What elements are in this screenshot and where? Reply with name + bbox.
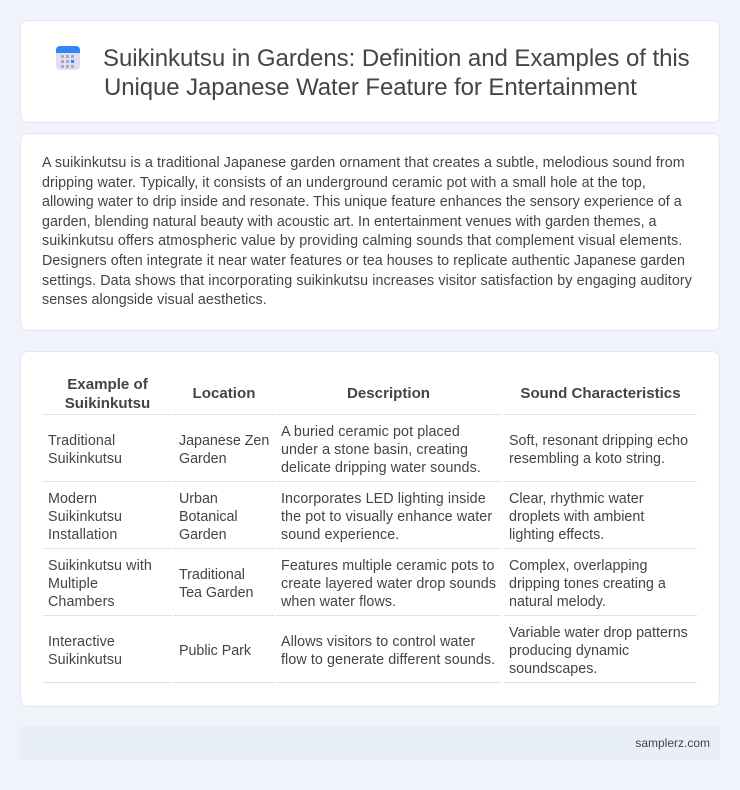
text block: definition: suikinkutsu offers atmospheric value by providing calming sounds that complement visual elements. — [42, 233, 682, 249]
row: modern: lighting effects. — [509, 527, 604, 543]
row: multiple chambers: Suikinkutsu with — [48, 558, 152, 574]
row: modern: Incorporates LED lighting inside — [281, 491, 486, 507]
row: multiple chambers: Tea Garden — [179, 585, 253, 601]
text block: definition: settings. Data shows that incorporating suikinkutsu increases visitor satisfaction by engaging auditory — [42, 273, 692, 289]
title: Unique Japanese Water Feature for Entertainment — [104, 74, 637, 101]
text block: definition: Designers often integrate it near water features or tea houses to replicate authentic Japanese garden — [42, 253, 685, 269]
icon: calendar — [56, 46, 80, 70]
row: modern — [48, 491, 644, 543]
row: traditional: Traditional — [48, 433, 115, 449]
row: interactive: Allows visitors to control water — [281, 634, 475, 650]
row: modern: Clear, rhythmic water — [509, 491, 643, 507]
row: interactive — [48, 625, 688, 677]
text block: definition: garden, blending natural beauty with acoustic art. In entertainment venues with garden themes, a — [42, 214, 657, 230]
row: traditional: Soft, resonant dripping echo — [509, 433, 688, 449]
row: traditional: A buried ceramic pot placed — [281, 424, 460, 440]
row: multiple chambers: when water flows. — [281, 594, 396, 610]
panel: definition text — [20, 133, 720, 331]
row: multiple chambers: dripping tones creating a — [509, 576, 666, 592]
row: modern: Suikinkutsu — [48, 509, 122, 525]
row: traditional — [48, 424, 688, 476]
text block: definition: A suikinkutsu is a traditional Japanese garden ornament that creates a subtle, melodious sound from — [42, 155, 685, 171]
row: interactive: flow to generate different sounds. — [281, 652, 495, 668]
row: traditional: Japanese Zen — [179, 433, 269, 449]
row: interactive: producing dynamic — [509, 643, 629, 659]
row: interactive: Public Park — [179, 643, 251, 659]
row: interactive: soundscapes. — [509, 661, 597, 677]
row: multiple chambers: Multiple — [48, 576, 98, 592]
text block: definition: dripping water. Typically, it consists of an underground ceramic pot with a small hole at the top, — [42, 175, 646, 191]
table header: Description — [347, 385, 430, 402]
row: traditional: resembling a koto string. — [509, 451, 665, 467]
text block: definition: allowing water to drip inside and resonate. This unique feature enhances the sensory experience of a — [42, 194, 682, 210]
table: suikinkutsu examples — [43, 376, 697, 683]
table header: Suikinkutsu — [65, 395, 150, 412]
text block: definition: senses alongside visual aesthetics. — [42, 292, 267, 308]
footer bar — [20, 726, 720, 760]
row: modern: Botanical — [179, 509, 238, 525]
row: multiple chambers: Traditional — [179, 567, 245, 583]
row: interactive: Interactive — [48, 634, 115, 650]
title: Suikinkutsu in Gardens: Definition and Examples of this — [103, 45, 690, 72]
row: multiple chambers: Complex, overlapping — [509, 558, 647, 574]
row: modern: the pot to visually enhance water — [281, 509, 492, 525]
row: multiple chambers: natural melody. — [509, 594, 606, 610]
row: traditional: Garden — [179, 451, 227, 467]
row: modern: droplets with ambient — [509, 509, 644, 525]
table header — [65, 376, 681, 412]
row: interactive: Variable water drop patterns — [509, 625, 688, 641]
row: modern: sound experience. — [281, 527, 399, 543]
panel: examples table — [20, 351, 720, 707]
table header: Sound Characteristics — [520, 385, 681, 402]
row: multiple chambers: Features multiple ceramic pots to — [281, 558, 495, 574]
row: traditional: under a stone basin, creating — [281, 442, 468, 458]
row: multiple chambers — [48, 558, 666, 610]
text block: definition — [42, 155, 692, 308]
table header: Example of — [67, 376, 148, 393]
row: modern: Modern — [48, 491, 97, 507]
footer text: samplerz.com — [635, 736, 710, 750]
row: interactive: Suikinkutsu — [48, 652, 122, 668]
title — [103, 45, 690, 101]
table header: Location — [193, 385, 255, 402]
row: traditional: delicate dripping water sounds. — [281, 460, 481, 476]
row: modern: Installation — [48, 527, 117, 543]
row: multiple chambers: create layered water drop sounds — [281, 576, 496, 592]
row: modern: Garden — [179, 527, 227, 543]
row: modern: Urban — [179, 491, 218, 507]
row: traditional: Suikinkutsu — [48, 451, 122, 467]
row: multiple chambers: Chambers — [48, 594, 115, 610]
panel: title card — [20, 20, 720, 123]
